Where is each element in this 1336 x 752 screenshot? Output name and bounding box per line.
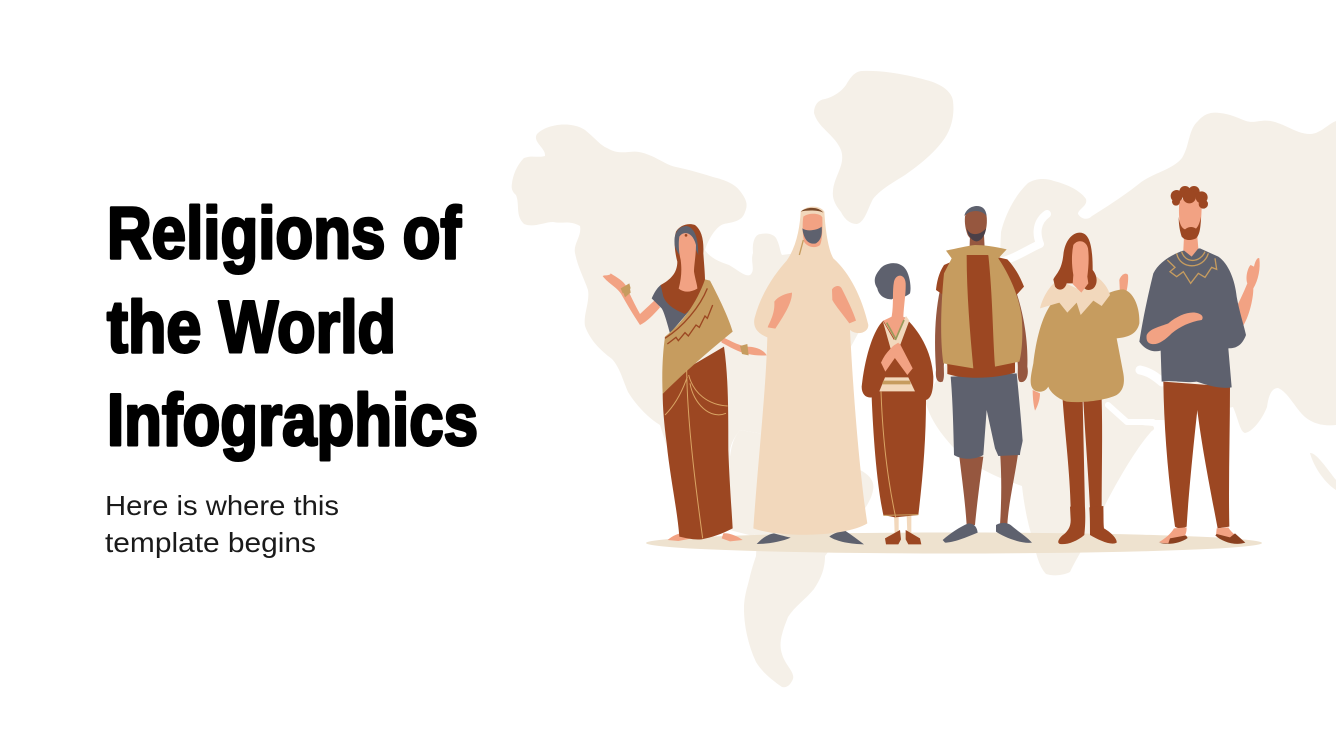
ground shadow <box>646 532 1262 554</box>
subtitle: Here is where this <box>105 490 339 521</box>
sash <box>662 279 733 394</box>
figure: man in vest <box>935 206 1032 543</box>
world map background <box>512 71 1336 687</box>
headband <box>801 208 823 213</box>
head scarf <box>661 224 705 314</box>
face and neck <box>883 276 907 340</box>
figure: woman in sari <box>603 224 767 541</box>
map: asian islands <box>1310 453 1336 490</box>
title <box>107 193 478 461</box>
sash pattern <box>665 288 713 344</box>
arm left <box>603 273 660 325</box>
bangles <box>621 283 631 297</box>
necklace <box>1167 252 1217 283</box>
feet <box>668 533 743 541</box>
figures left group <box>603 207 933 544</box>
hand lower <box>1033 390 1040 411</box>
map: africa <box>925 319 1154 575</box>
face <box>679 233 697 292</box>
neck <box>1183 237 1198 257</box>
obi <box>879 377 915 391</box>
figure: woman in kimono <box>862 263 933 544</box>
face <box>1179 198 1202 240</box>
legs <box>1063 398 1102 508</box>
blouse <box>652 285 690 333</box>
arm right <box>720 336 767 355</box>
hair <box>875 263 911 299</box>
sweater <box>1031 289 1139 402</box>
drape lines <box>665 370 728 538</box>
map: north america <box>512 124 860 537</box>
vest <box>941 245 1022 368</box>
robe <box>753 207 868 535</box>
curly hair <box>1171 186 1208 209</box>
title: Religions of <box>107 193 462 274</box>
figure: woman in sweater <box>1031 233 1139 544</box>
map: greenland <box>814 71 953 224</box>
praying hands <box>881 343 913 375</box>
title: Infographics <box>107 380 478 461</box>
shoes <box>943 523 1032 543</box>
sandals <box>1159 533 1245 544</box>
legs <box>959 452 1018 525</box>
shorts <box>951 373 1023 459</box>
map white gaps <box>1000 214 1162 422</box>
neck and head <box>969 235 985 259</box>
folded arm <box>1147 313 1203 344</box>
collar <box>883 316 909 350</box>
seam <box>881 391 896 517</box>
beard <box>802 227 822 244</box>
raised arm <box>1233 258 1260 329</box>
sandals and legs <box>894 515 911 533</box>
raised hand <box>1119 274 1128 293</box>
shirt <box>936 254 1024 378</box>
feet <box>1159 527 1244 543</box>
trousers <box>1163 382 1230 528</box>
title: the World <box>107 287 396 368</box>
tunic <box>1139 248 1246 388</box>
map: eurasia <box>991 113 1336 433</box>
collar <box>1040 277 1110 315</box>
subtitle: template begins <box>105 527 316 558</box>
hair <box>1053 233 1097 290</box>
figure: man in thobe <box>753 207 868 544</box>
cord <box>799 240 803 255</box>
face <box>803 214 822 247</box>
beard <box>1179 217 1201 240</box>
kimono <box>862 317 933 517</box>
arms <box>935 290 1028 382</box>
skirt <box>663 347 733 539</box>
face and neck <box>1072 241 1089 293</box>
hands <box>768 286 856 329</box>
map: south america <box>728 430 873 687</box>
shoes <box>757 531 864 544</box>
subtitle <box>105 490 339 558</box>
figure: man in grey tunic <box>1139 186 1260 544</box>
boots <box>1058 506 1117 544</box>
hair <box>674 226 698 255</box>
figures right group <box>935 186 1260 544</box>
